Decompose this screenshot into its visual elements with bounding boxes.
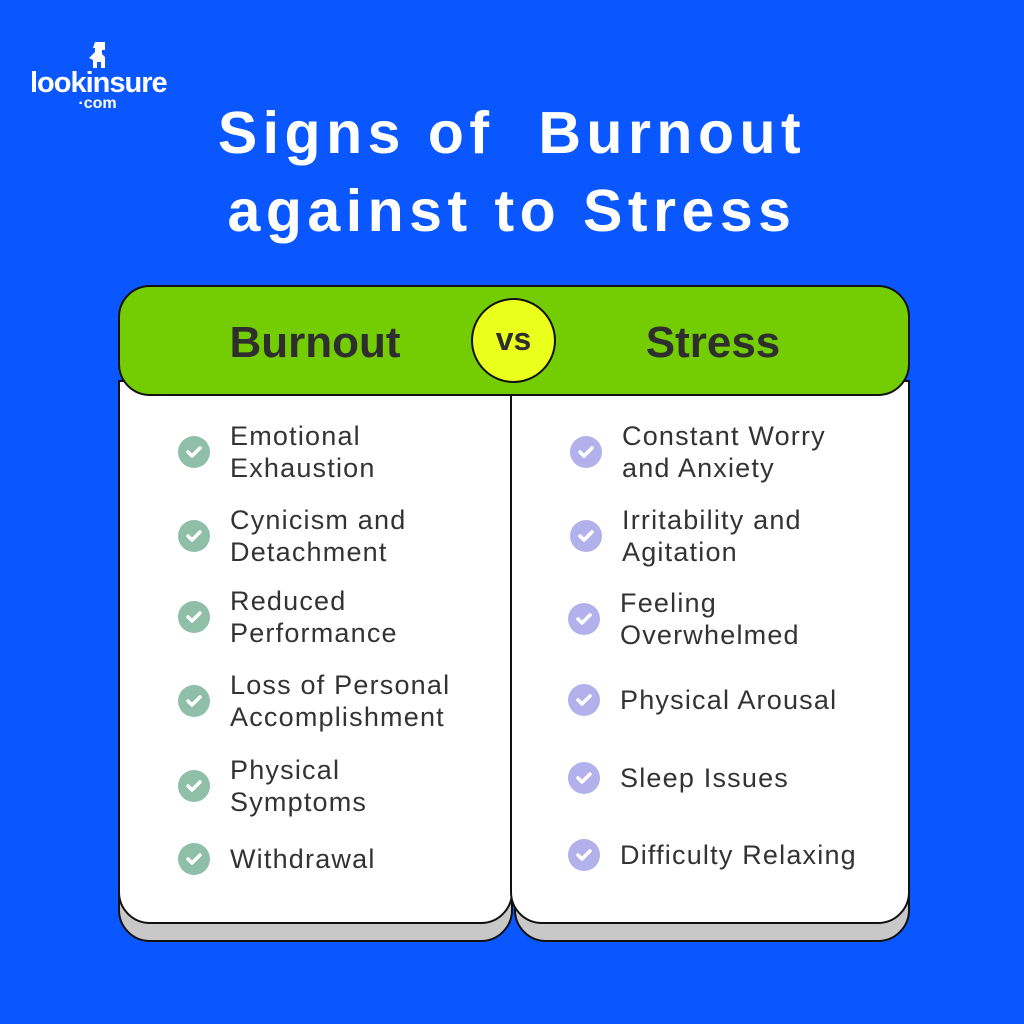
panel: stress: Sleep Issues (620, 763, 789, 793)
panel: stress: Difficulty Relaxing (620, 840, 857, 870)
panel: stress: Physical Arousal (620, 685, 837, 715)
panel: burnout: Reduced (230, 586, 346, 616)
burnout items (178, 421, 376, 483)
panel: stress: Agitation (622, 537, 738, 567)
vs badge: vs (496, 321, 531, 357)
panel: stress (510, 380, 910, 924)
panel: burnout: Accomplishment (230, 702, 445, 732)
panel: burnout: Physical (230, 755, 340, 785)
panel: burnout: Loss of Personal (230, 670, 450, 700)
panel: burnout (118, 380, 513, 924)
title (218, 100, 806, 244)
title: Signs of Burnout (218, 100, 806, 166)
logo (30, 42, 167, 112)
panel: stress: Overwhelmed (620, 620, 800, 650)
card shadows (118, 400, 513, 942)
panel: burnout: Withdrawal (230, 844, 376, 874)
vs badge (471, 298, 556, 383)
heading: burnout: Burnout (229, 318, 401, 367)
header bar (118, 285, 910, 396)
logo: lookinsure (30, 67, 167, 99)
panel: stress: Irritability and (622, 505, 802, 535)
panel: stress: Feeling (620, 588, 717, 618)
logo: ·com (78, 95, 117, 112)
heading: stress: Stress (646, 318, 780, 367)
panel: burnout: Symptoms (230, 787, 367, 817)
panel: burnout: Cynicism and (230, 505, 406, 535)
burnout items: Exhaustion (230, 453, 376, 483)
panel: burnout: Detachment (230, 537, 388, 567)
title: against to Stress (228, 178, 796, 244)
stress items (570, 421, 826, 483)
stress items: Constant Worry (622, 421, 826, 451)
stress items: and Anxiety (622, 453, 775, 483)
burnout items: Emotional (230, 421, 361, 451)
panel: burnout: Performance (230, 618, 398, 648)
